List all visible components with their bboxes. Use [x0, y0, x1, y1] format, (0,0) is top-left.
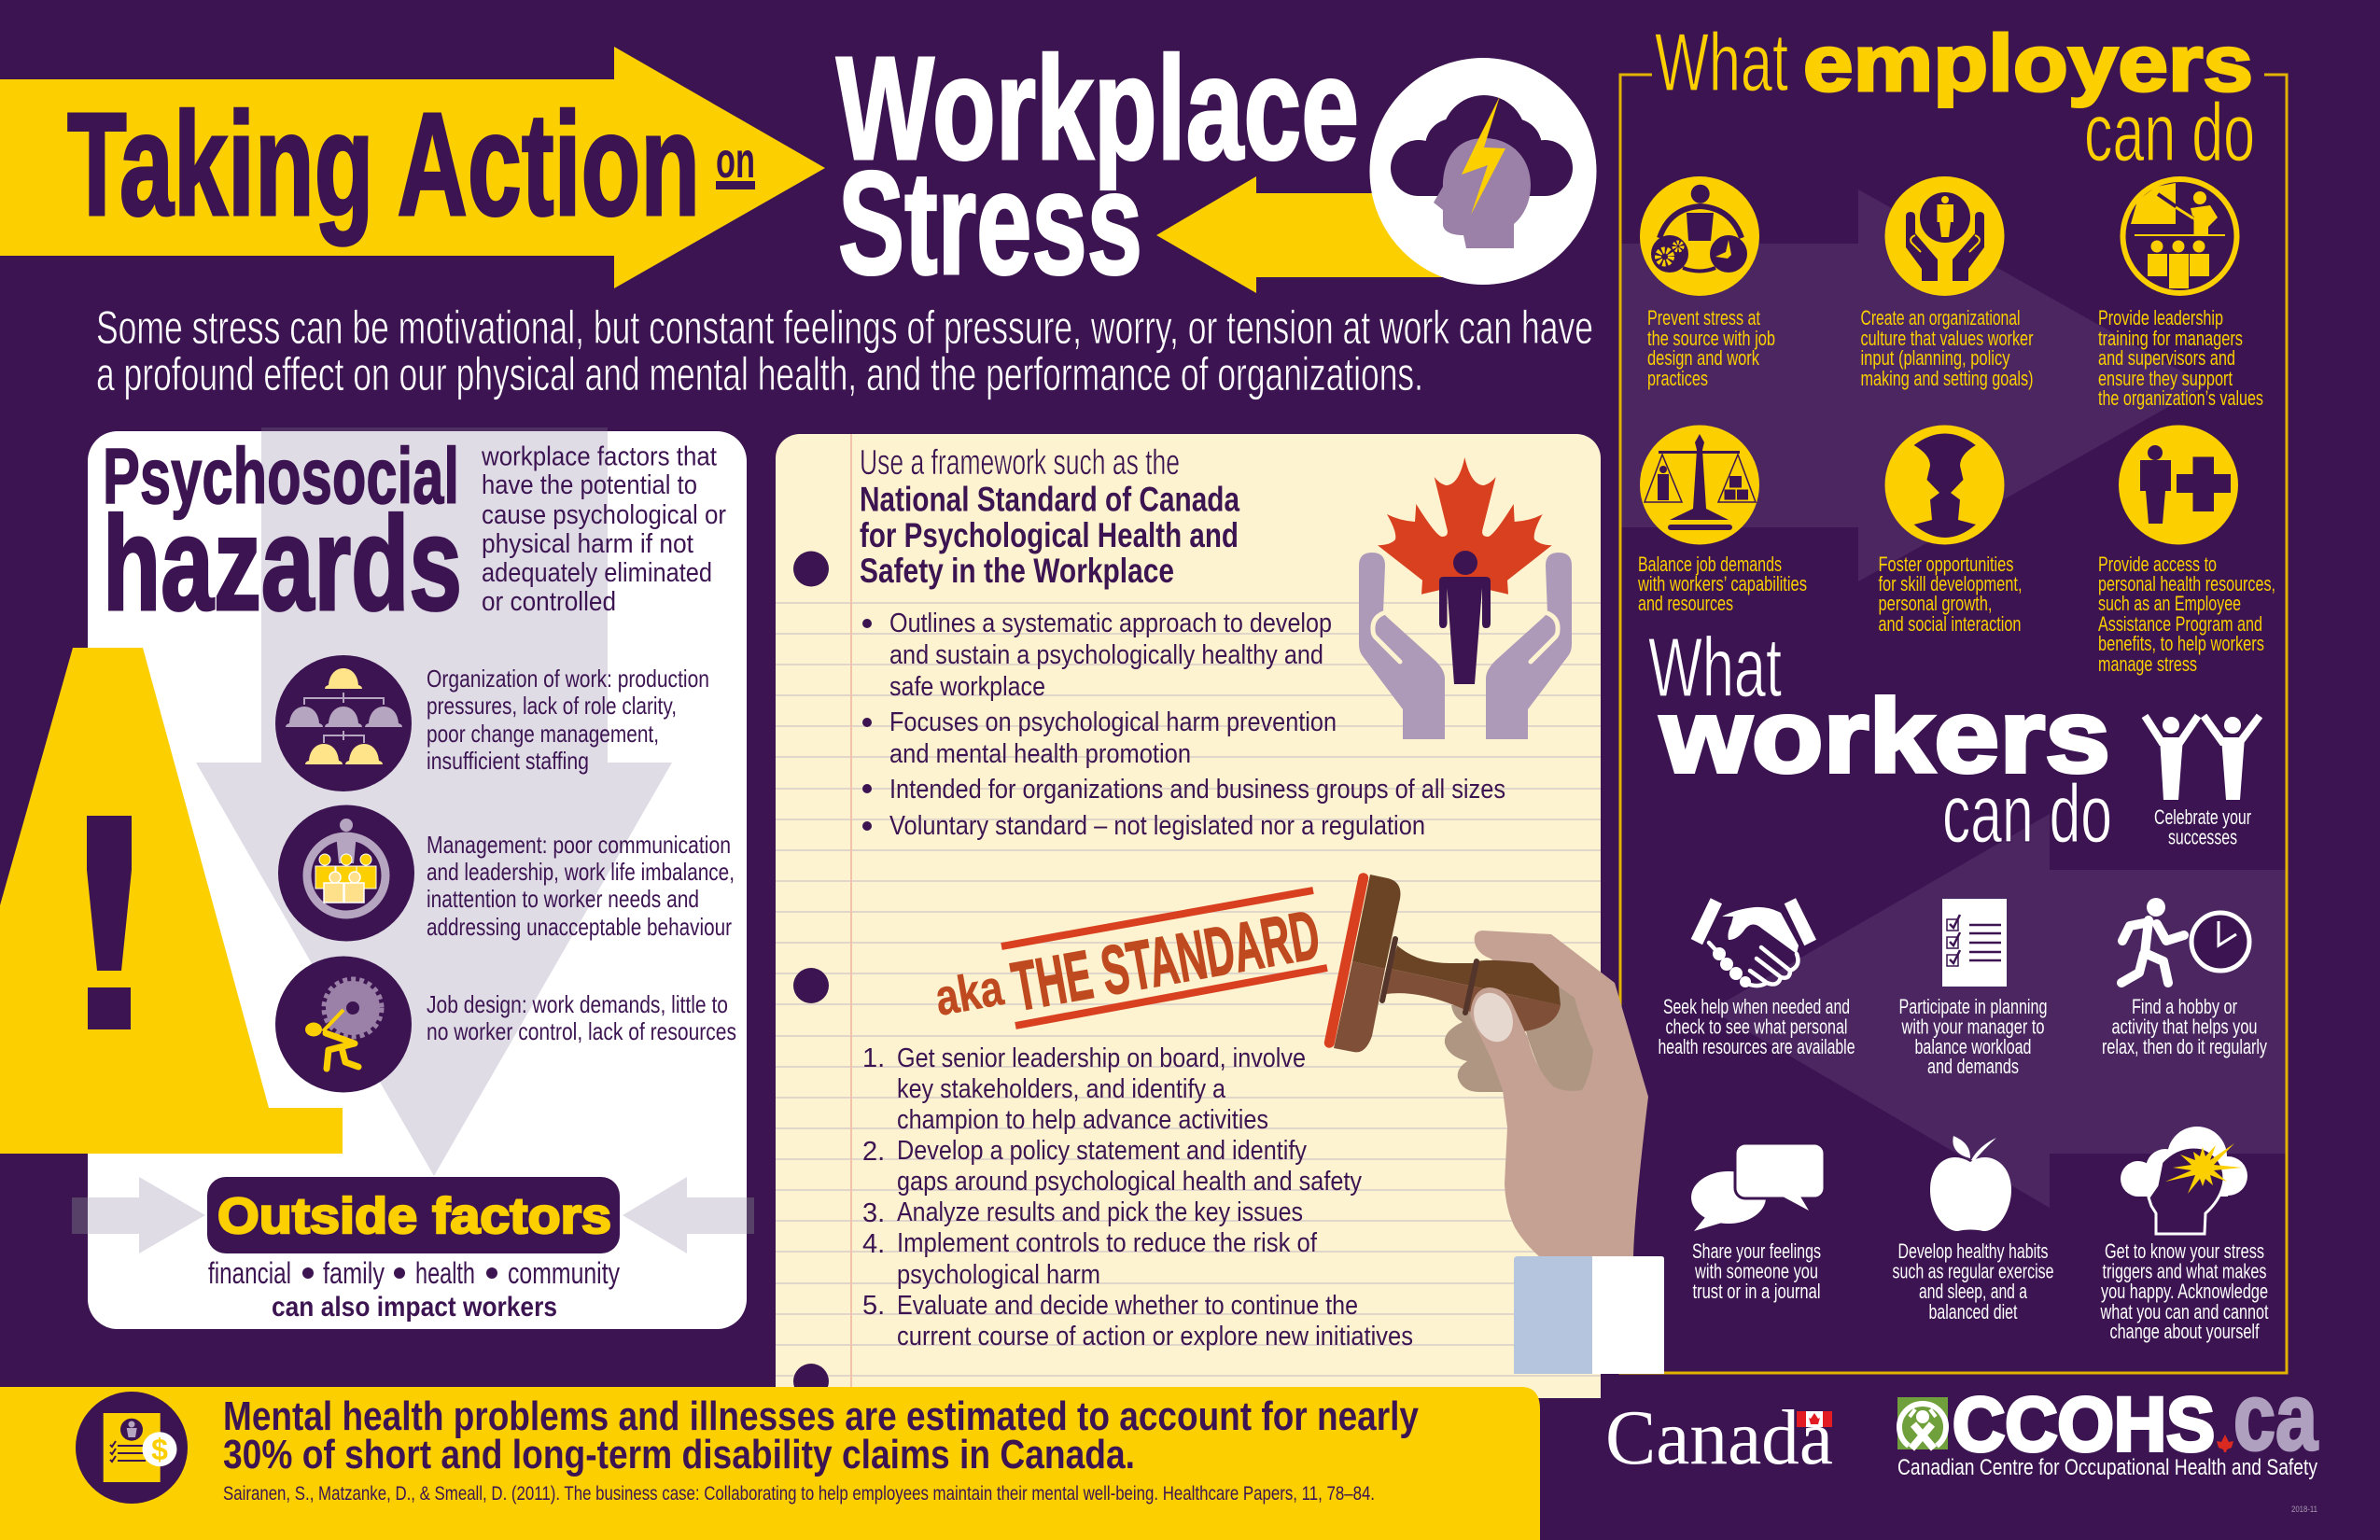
- thumb: [1470, 987, 1554, 1120]
- bulleted list: [862, 609, 1505, 841]
- finger shadow right: [1526, 987, 1593, 1091]
- heading: Psychosocial hazards: [103, 432, 462, 638]
- text: outside factor list: financial: [208, 1256, 291, 1290]
- text: organizational culture: culture that values worker: [1861, 327, 2033, 350]
- text: seek help: health resources are available: [1658, 1035, 1855, 1058]
- text: balance demands: Balance job demands: [1638, 553, 1782, 576]
- intro text: Some stress can be motivational, but constant feelings of pressure, worry, or tension at work can have: [96, 301, 1593, 354]
- text: stress triggers: you happy. Acknowledge: [2101, 1280, 2268, 1303]
- text: balance demands: with workers’ capabilities: [1637, 572, 1807, 595]
- numbered steps: 4.: [862, 1229, 885, 1259]
- heading: national standard: [860, 443, 1239, 590]
- text: find a hobby: activity that helps you: [2111, 1015, 2257, 1038]
- numbered steps: champion to help advance activities: [897, 1105, 1268, 1135]
- definition text: or controlled: [482, 587, 616, 617]
- icon: two faces forming a vase: [1885, 426, 2005, 545]
- numbered steps: 3.: [862, 1198, 885, 1228]
- text: find a hobby: [2102, 995, 2267, 1058]
- text: healthy habits: such as regular exercise: [1893, 1260, 2053, 1282]
- icon: hands holding person: [1885, 176, 2005, 296]
- icon: handshake: [1691, 898, 1816, 987]
- numbered steps: key stakeholders, and identify a: [897, 1074, 1226, 1104]
- logo: CCOHS: CCOHS: [1953, 1382, 2215, 1467]
- text: seek help: Seek help when needed and: [1663, 995, 1850, 1018]
- definition text: have the potential to: [482, 470, 697, 500]
- definition text: [481, 442, 726, 617]
- text: foster opportunities: and social interaction: [1878, 612, 2022, 636]
- numbered steps: Implement controls to reduce the risk of: [897, 1228, 1318, 1258]
- text: outside factor list: family: [323, 1256, 385, 1290]
- text: foster opportunities: personal growth,: [1878, 592, 1992, 615]
- arrow: employers background arrow: [1620, 189, 2206, 581]
- text: personal health resources: Provide access to: [2098, 553, 2217, 576]
- heading: Psychosocial hazards: hazards: [103, 490, 462, 638]
- icon: head under a storm cloud with lightning: [1370, 58, 1596, 285]
- heading: What workers can do: What: [1648, 622, 1782, 715]
- text: participate: [1898, 995, 2048, 1078]
- bulleted list: Outlines a systematic approach to develop: [889, 609, 1332, 638]
- illustration: hand holding rubber stamp: [1329, 875, 1664, 1374]
- logo: CCOHS: [1897, 1364, 2318, 1480]
- bulleted list: Voluntary standard – not legislated nor a regulation: [889, 811, 1425, 841]
- icon: manager and workers in a ring: [278, 805, 414, 941]
- bulleted list: safe workplace: [889, 672, 1045, 702]
- title: Taking Action on: Taking Action: [67, 83, 700, 246]
- text: prevent stress: practices: [1647, 367, 1708, 390]
- text: balance demands: and resources: [1638, 592, 1733, 615]
- text: participate: Participate in planning: [1898, 995, 2048, 1018]
- text: personal health resources: benefits, to help workers: [2098, 632, 2264, 655]
- text: share feelings: [1692, 1239, 1821, 1303]
- text: share feelings: Share your feelings: [1692, 1239, 1821, 1263]
- icon: person and medical cross: [2119, 426, 2238, 545]
- bulleted list: and mental health promotion: [889, 739, 1191, 769]
- text: leadership training: the organization’s values: [2098, 386, 2263, 410]
- intro text: a profound effect on our physical and mental health, and the performance of organizations.: [96, 348, 1423, 400]
- callout: outside factors: Outside factors: [217, 1188, 611, 1244]
- bulleted list: Focuses on psychological harm prevention: [889, 707, 1337, 737]
- band: yellow statistic strip: [0, 1387, 1540, 1540]
- text: celebrate: successes: [2168, 825, 2237, 849]
- text: management: inattention to worker needs and: [427, 885, 699, 913]
- text: outside factor list: [208, 1256, 620, 1323]
- numbered steps: Evaluate and decide whether to continue the: [897, 1291, 1358, 1321]
- text: participate: and demands: [1927, 1055, 2019, 1078]
- text: prevent stress: the source with job: [1647, 327, 1775, 350]
- text: management: Management: poor communication: [427, 831, 731, 859]
- text: healthy habits: Develop healthy habits: [1898, 1239, 2048, 1263]
- panel: psychosocial hazards: [88, 427, 747, 1329]
- text: job design: [427, 990, 736, 1045]
- text: personal health resources: such as an Employee: [2098, 592, 2241, 615]
- text: leadership training: ensure they support: [2098, 367, 2233, 390]
- title: Workplace Stress: Workplace: [836, 27, 1359, 190]
- icon: leader teaching audience: [2121, 176, 2240, 296]
- icon: runner and clock: [2121, 898, 2249, 983]
- text: organization of work: [427, 665, 709, 775]
- text: job design: Job design: work demands, little to: [427, 990, 728, 1018]
- text: organizational culture: [1861, 306, 2033, 390]
- text: participate: balance workload: [1915, 1035, 2031, 1058]
- text: personal health resources: manage stress: [2098, 652, 2197, 676]
- text: management: and leadership, work life imbalance,: [427, 858, 735, 886]
- title: Workplace Stress: Stress: [838, 142, 1142, 305]
- numbered steps: [862, 1043, 1413, 1351]
- definition text: cause psychological or: [482, 500, 726, 530]
- heading: What workers can do: [1648, 622, 2112, 860]
- text: organization of work: Organization of work: production: [427, 665, 709, 693]
- text: prevent stress: [1647, 306, 1775, 390]
- text: organization of work: poor change management,: [427, 720, 659, 748]
- heading: What employers can do: What: [1655, 16, 1788, 108]
- text: personal health resources: [2098, 553, 2275, 676]
- icon: hands holding person with maple leaf: [1359, 457, 1572, 739]
- text: find a hobby: Find a hobby or: [2132, 995, 2237, 1018]
- icon: speech bubbles: [1691, 1143, 1825, 1231]
- heading: What workers can do: workers: [1659, 679, 2110, 794]
- text: outside factor list: community: [508, 1256, 620, 1290]
- text: balance demands: [1637, 553, 1807, 615]
- panel: lined notepaper: [776, 434, 1601, 1399]
- text: leadership training: Provide leadership: [2098, 306, 2223, 329]
- numbered steps: psychological harm: [897, 1260, 1100, 1290]
- text: management: addressing unacceptable behaviour: [427, 913, 732, 941]
- heading: What employers can do: employers: [1803, 20, 2253, 108]
- numbered steps: Develop a policy statement and identify: [897, 1136, 1307, 1166]
- text: foster opportunities: for skill development,: [1878, 572, 2022, 595]
- arrow: yellow title arrow pointing right: [0, 47, 825, 288]
- heading: Psychosocial hazards: Psychosocial: [103, 432, 459, 520]
- bulleted list: and sustain a psychologically healthy and: [889, 640, 1323, 670]
- icon: head with cloud and starburst: [2121, 1127, 2247, 1234]
- text: organizational culture: making and setting goals): [1861, 367, 2033, 390]
- title: Workplace Stress: [836, 27, 1359, 305]
- stamp mark: aka the standard: aka: [931, 959, 1008, 1027]
- icon: checklist: [1942, 899, 2007, 987]
- text: healthy habits: balanced diet: [1928, 1300, 2018, 1323]
- text: prevent stress: design and work: [1647, 346, 1760, 370]
- heading: national standard: Safety in the Workplace: [860, 552, 1174, 590]
- numbered steps: gaps around psychological health and safety: [897, 1167, 1362, 1197]
- arrow: pale arrow from left into outside factors: [72, 1177, 205, 1253]
- numbered steps: 2.: [862, 1137, 885, 1167]
- text: publication date: 2018-11: [2291, 1505, 2317, 1514]
- text: stress triggers: change about yourself: [2109, 1320, 2260, 1343]
- heading: national standard: Use a framework such as the: [860, 443, 1180, 483]
- text: leadership training: and supervisors and: [2098, 346, 2235, 370]
- callout: outside factors: [207, 1177, 620, 1253]
- icon: document with dollar sign: $: [151, 1433, 168, 1466]
- bulleted list: Intended for organizations and business groups of all sizes: [889, 775, 1505, 805]
- icon: organization chart of hard hats: [275, 655, 412, 791]
- text: outside factor list: health: [415, 1256, 475, 1290]
- text: stress triggers: [2100, 1239, 2268, 1343]
- heading: national standard: National Standard of Canada: [860, 480, 1239, 519]
- text: personal health resources: personal health resources,: [2098, 572, 2275, 595]
- heading: national standard: for Psychological Health and: [860, 516, 1239, 554]
- stamp mark: aka the standard: THE STANDARD: [1006, 895, 1325, 1026]
- text: organization of work: insufficient staffing: [427, 747, 589, 775]
- numbered steps: current course of action or explore new initiatives: [897, 1322, 1413, 1351]
- text: leadership training: training for managers: [2098, 327, 2243, 350]
- title: Taking Action on: on: [716, 133, 755, 189]
- heading: What workers can do: can do: [1942, 767, 2112, 860]
- text: seek help: [1658, 995, 1855, 1058]
- text: organizational culture: Create an organizational: [1861, 306, 2020, 329]
- icon: worker lifting a gear: [275, 956, 412, 1092]
- text: seek help: check to see what personal: [1665, 1015, 1848, 1038]
- arrow: yellow arrow pointing left: [1156, 176, 1493, 293]
- text: personal health resources: Assistance Program and: [2098, 612, 2262, 636]
- stamp mark: aka the standard: [931, 890, 1327, 1027]
- text: find a hobby: relax, then do it regularly: [2102, 1035, 2267, 1058]
- text: stress triggers: triggers and what makes: [2102, 1260, 2266, 1282]
- numbered steps: Analyze results and pick the key issues: [897, 1197, 1303, 1227]
- logo: CCOHS: ca: [2233, 1364, 2318, 1470]
- text: statistic: 30% of short and long-term disability claims in Canada.: [223, 1432, 1135, 1477]
- text: share feelings: trust or in a journal: [1693, 1280, 1820, 1303]
- text: healthy habits: and sleep, and a: [1919, 1280, 2028, 1303]
- numbered steps: Get senior leadership on board, involve: [897, 1043, 1306, 1073]
- arrow: workers background arrow: [1711, 814, 2287, 1208]
- logo: Canada wordmark: Canada: [1605, 1394, 1833, 1481]
- arrow: pale arrow from right into outside factors: [623, 1177, 754, 1253]
- hand and arm: [1475, 931, 1648, 1257]
- text: share feelings: with someone you: [1694, 1260, 1818, 1282]
- definition text: workplace factors that: [481, 442, 717, 472]
- heading: What employers can do: can do: [2084, 86, 2255, 178]
- numbered steps: 1.: [862, 1043, 885, 1073]
- text: leadership training: [2098, 306, 2263, 410]
- icon: two people celebrating: [2145, 716, 2260, 800]
- arrow: large pale down arrow: [196, 427, 672, 1176]
- text: participate: with your manager to: [1901, 1015, 2044, 1038]
- heading: What employers can do: [1655, 16, 2255, 178]
- stamp handle: [1329, 875, 1561, 1052]
- text: celebrate: [2154, 805, 2251, 849]
- panel frame: employers and workers: [1620, 75, 2287, 1373]
- text: celebrate: Celebrate your: [2154, 805, 2251, 829]
- numbered steps: 5.: [862, 1291, 885, 1321]
- intro text: [96, 301, 1593, 400]
- icon: apple: [1930, 1136, 2011, 1231]
- icon: warning triangle with exclamation mark: [0, 648, 343, 1154]
- cuff: [1514, 1256, 1592, 1374]
- text: statistic: [223, 1393, 1419, 1477]
- text: foster opportunities: Foster opportunities: [1878, 553, 2014, 576]
- text: job design: no worker control, lack of resources: [427, 1017, 736, 1045]
- definition text: physical harm if not: [482, 529, 693, 559]
- icon: balance scales: [1640, 426, 1759, 545]
- text: healthy habits: [1893, 1239, 2053, 1323]
- text: citation: Sairanen, S., Matzanke, D., & Smeall, D. (2011). The business case: Collaborating to help employees maintain their mental well-being. Healthcare Papers, 11, 78–84.: [223, 1483, 1375, 1505]
- definition text: adequately eliminated: [482, 558, 712, 588]
- text: stress triggers: what you can and cannot: [2100, 1300, 2268, 1323]
- icon: document with dollar sign: [76, 1392, 188, 1504]
- text: management: [427, 831, 735, 941]
- text: organizational culture: input (planning, policy: [1861, 346, 2010, 370]
- text: statistic: Mental health problems and illnesses are estimated to account for nearly: [223, 1393, 1419, 1439]
- text: organization of work: pressures, lack of role clarity,: [427, 692, 677, 720]
- finger shadow left: [1445, 1005, 1512, 1092]
- text: outside factor list: can also impact workers: [272, 1292, 557, 1323]
- text: prevent stress: Prevent stress at: [1647, 306, 1760, 329]
- icon: person with gears and clock: [1640, 176, 1759, 296]
- text: stress triggers: Get to know your stress: [2105, 1239, 2264, 1263]
- text: foster opportunities: [1878, 553, 2022, 636]
